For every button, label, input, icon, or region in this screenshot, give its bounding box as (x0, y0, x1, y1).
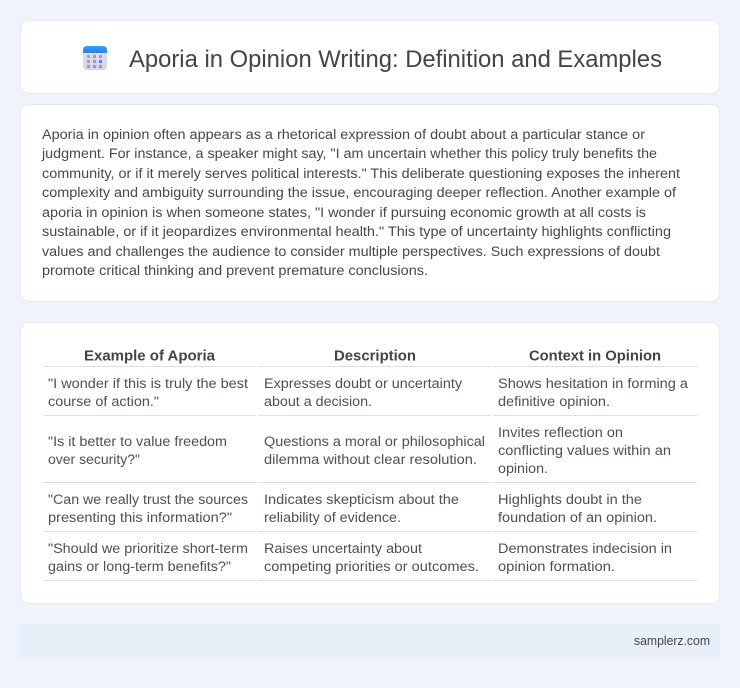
table row 4: Demonstrates indecision in (498, 541, 672, 557)
table header: Description (334, 348, 416, 364)
table header: Context in Opinion (529, 348, 661, 364)
table row 4: opinion formation. (498, 559, 615, 575)
table row 3: foundation of an opinion. (498, 510, 657, 526)
table row 2: over security?" (48, 452, 140, 468)
table row 3: Indicates skepticism about the (264, 492, 459, 508)
text block: paragraph: sustainable, or if it jeopardizes environmental health." This type of uncertainty highlights conflicting (42, 224, 671, 240)
text block: paragraph: Aporia in opinion often appears as a rhetorical expression of doubt about a particular stance or (42, 127, 645, 143)
table row 3: reliability of evidence. (264, 510, 401, 526)
table row 4: competing priorities or outcomes. (264, 559, 479, 575)
table row 1: Expresses doubt or uncertainty (264, 376, 463, 392)
table row 3 (48, 492, 657, 526)
table row 2: "Is it better to value freedom (48, 434, 227, 450)
table row 3: "Can we really trust the sources (48, 492, 248, 508)
table row 3: presenting this information?" (48, 510, 232, 526)
table row 2 (48, 425, 671, 477)
footer text: samplerz.com (634, 634, 710, 648)
table row 1: about a decision. (264, 394, 372, 410)
panel: intro paragraph (20, 104, 720, 302)
table row 2: opinion. (498, 461, 548, 477)
table row 1: Shows hesitation in forming a (498, 376, 688, 392)
footer bar (20, 624, 720, 658)
text block: paragraph: complexity and ambiguity surrounding the issue, encouraging deeper reflection. Another example of (42, 185, 676, 201)
table header (84, 348, 661, 364)
text block: paragraph: values and challenges the audience to consider multiple perspectives. Such expressions of doubt (42, 244, 660, 260)
table row 4: "Should we prioritize short-term (48, 541, 248, 557)
table row 2: conflicting values within an (498, 443, 671, 459)
table row 1: "I wonder if this is truly the best (48, 376, 248, 392)
panel: examples table (20, 322, 720, 604)
table row 2: Invites reflection on (498, 425, 623, 441)
table row 4: Raises uncertainty about (264, 541, 422, 557)
table header: Example of Aporia (84, 348, 216, 364)
title: Aporia in Opinion Writing: Definition and Examples (129, 46, 662, 73)
text block: paragraph (41, 127, 680, 279)
table row 4: gains or long-term benefits?" (48, 559, 231, 575)
panel: title header (20, 20, 720, 94)
text block: paragraph: aporia in opinion is when someone states, "I wonder if pursuing economic growth at all costs is (42, 205, 646, 221)
text block: paragraph: community, or if it merely serves political interests." This deliberate questioning exposes the inherent (42, 166, 680, 182)
text block: paragraph: judgment. For instance, a speaker might say, "I am uncertain whether this policy truly benefits the (41, 146, 657, 162)
table row 3: Highlights doubt in the (498, 492, 642, 508)
table row 1 (48, 376, 688, 410)
table row 4 (48, 541, 672, 575)
table row 1: course of action." (48, 394, 159, 410)
icon: calendar (83, 46, 107, 70)
table row 2: dilemma without clear resolution. (264, 452, 477, 468)
table row 1: definitive opinion. (498, 394, 610, 410)
text block: paragraph: promote critical thinking and prevent premature conclusions. (42, 263, 428, 279)
table row 2: Questions a moral or philosophical (264, 434, 485, 450)
